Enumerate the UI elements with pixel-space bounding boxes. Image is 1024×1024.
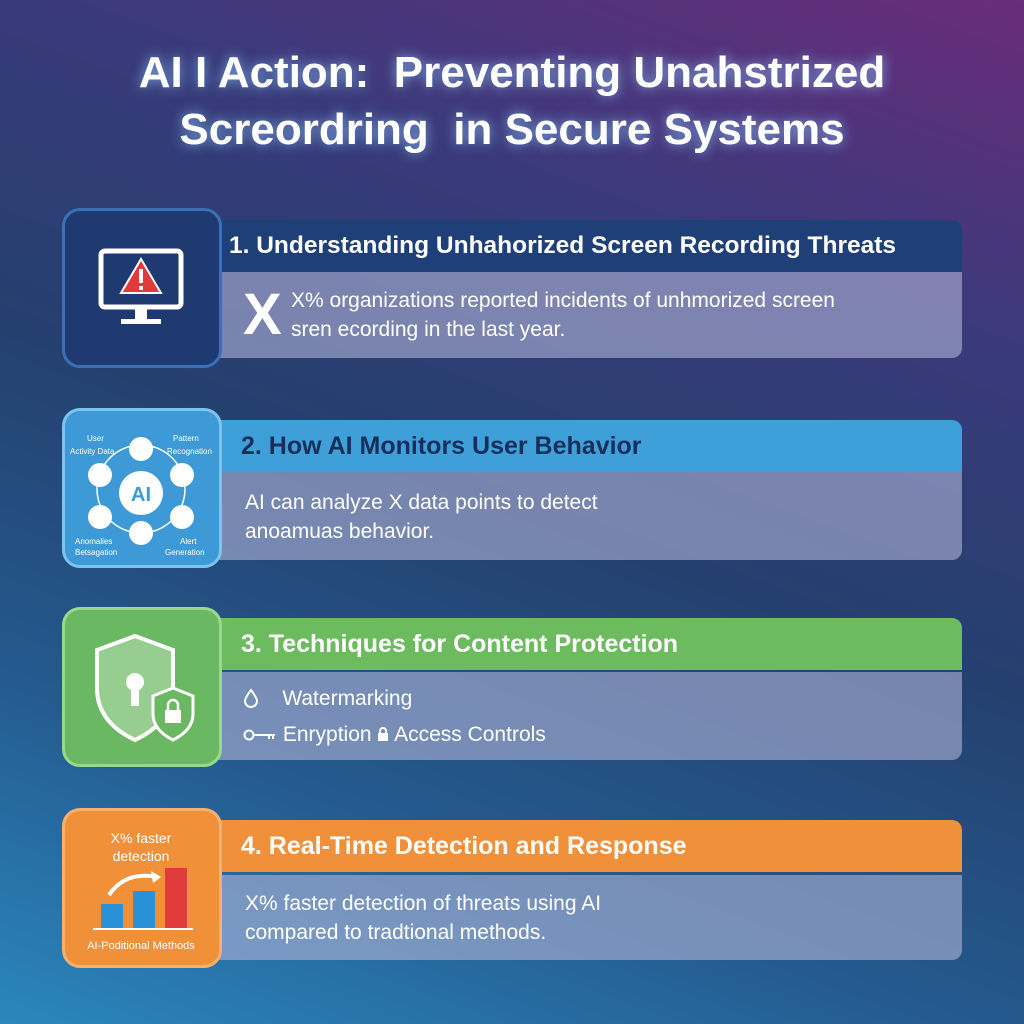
icon: shield lock [62, 607, 222, 767]
icon: bar chart: AI-Poditional Methods [87, 940, 195, 952]
icon: AI cycle [62, 408, 222, 568]
title: AI I Action: Preventing Unahstrized [139, 48, 885, 97]
panel 1 [62, 208, 962, 368]
icon: AI cycle: Generation [165, 548, 205, 557]
header 4 [215, 820, 962, 872]
icon: AI cycle: Alert [180, 537, 197, 546]
icon: bar chart [62, 808, 222, 968]
body 4: X% faster detection of threats using AI [245, 892, 601, 915]
body 4 [215, 875, 962, 960]
body 3 [215, 672, 962, 760]
body 2: anoamuas behavior. [245, 520, 434, 543]
body 1: X [243, 282, 282, 347]
icon: monitor warning [62, 208, 222, 368]
encryption access item: Enryption Access Controls [283, 723, 546, 746]
body 2 [215, 472, 962, 560]
body 1 [215, 272, 962, 358]
header 4: 4. Real-Time Detection and Response [241, 832, 686, 860]
watermarking item: Watermarking [282, 687, 412, 710]
header 2: 2. How AI Monitors User Behavior [241, 432, 642, 460]
icon: AI cycle: Recognation [167, 447, 212, 456]
header 2 [215, 420, 962, 472]
header 1: 1. Understanding Unhahorized Screen Recording Threats [229, 232, 896, 259]
icon: bar chart: X% faster [111, 830, 172, 846]
panel 4 [62, 808, 962, 968]
icon: AI cycle: Pattern [173, 434, 199, 443]
body 2: AI can analyze X data points to detect [245, 491, 598, 514]
icon: AI cycle: Betsagation [75, 548, 117, 557]
body 1: sren ecording in the last year. [291, 318, 565, 341]
body 4: compared to tradtional methods. [245, 921, 546, 944]
icon: AI cycle: AI [131, 484, 151, 506]
body 1: X% organizations reported incidents of unhmorized screen [291, 289, 835, 312]
panel 2 [62, 408, 962, 568]
panel 3 [62, 607, 962, 767]
icon: AI cycle: User [87, 434, 104, 443]
icon: bar chart: detection [113, 848, 169, 864]
header 3 [215, 618, 962, 670]
header 1 [215, 220, 962, 272]
title: Screordring in Secure Systems [179, 105, 845, 154]
header 3: 3. Techniques for Content Protection [241, 630, 678, 658]
icon: AI cycle: Anomalies [75, 537, 112, 546]
icon: AI cycle: Activity Data [70, 447, 115, 456]
title [134, 48, 890, 160]
